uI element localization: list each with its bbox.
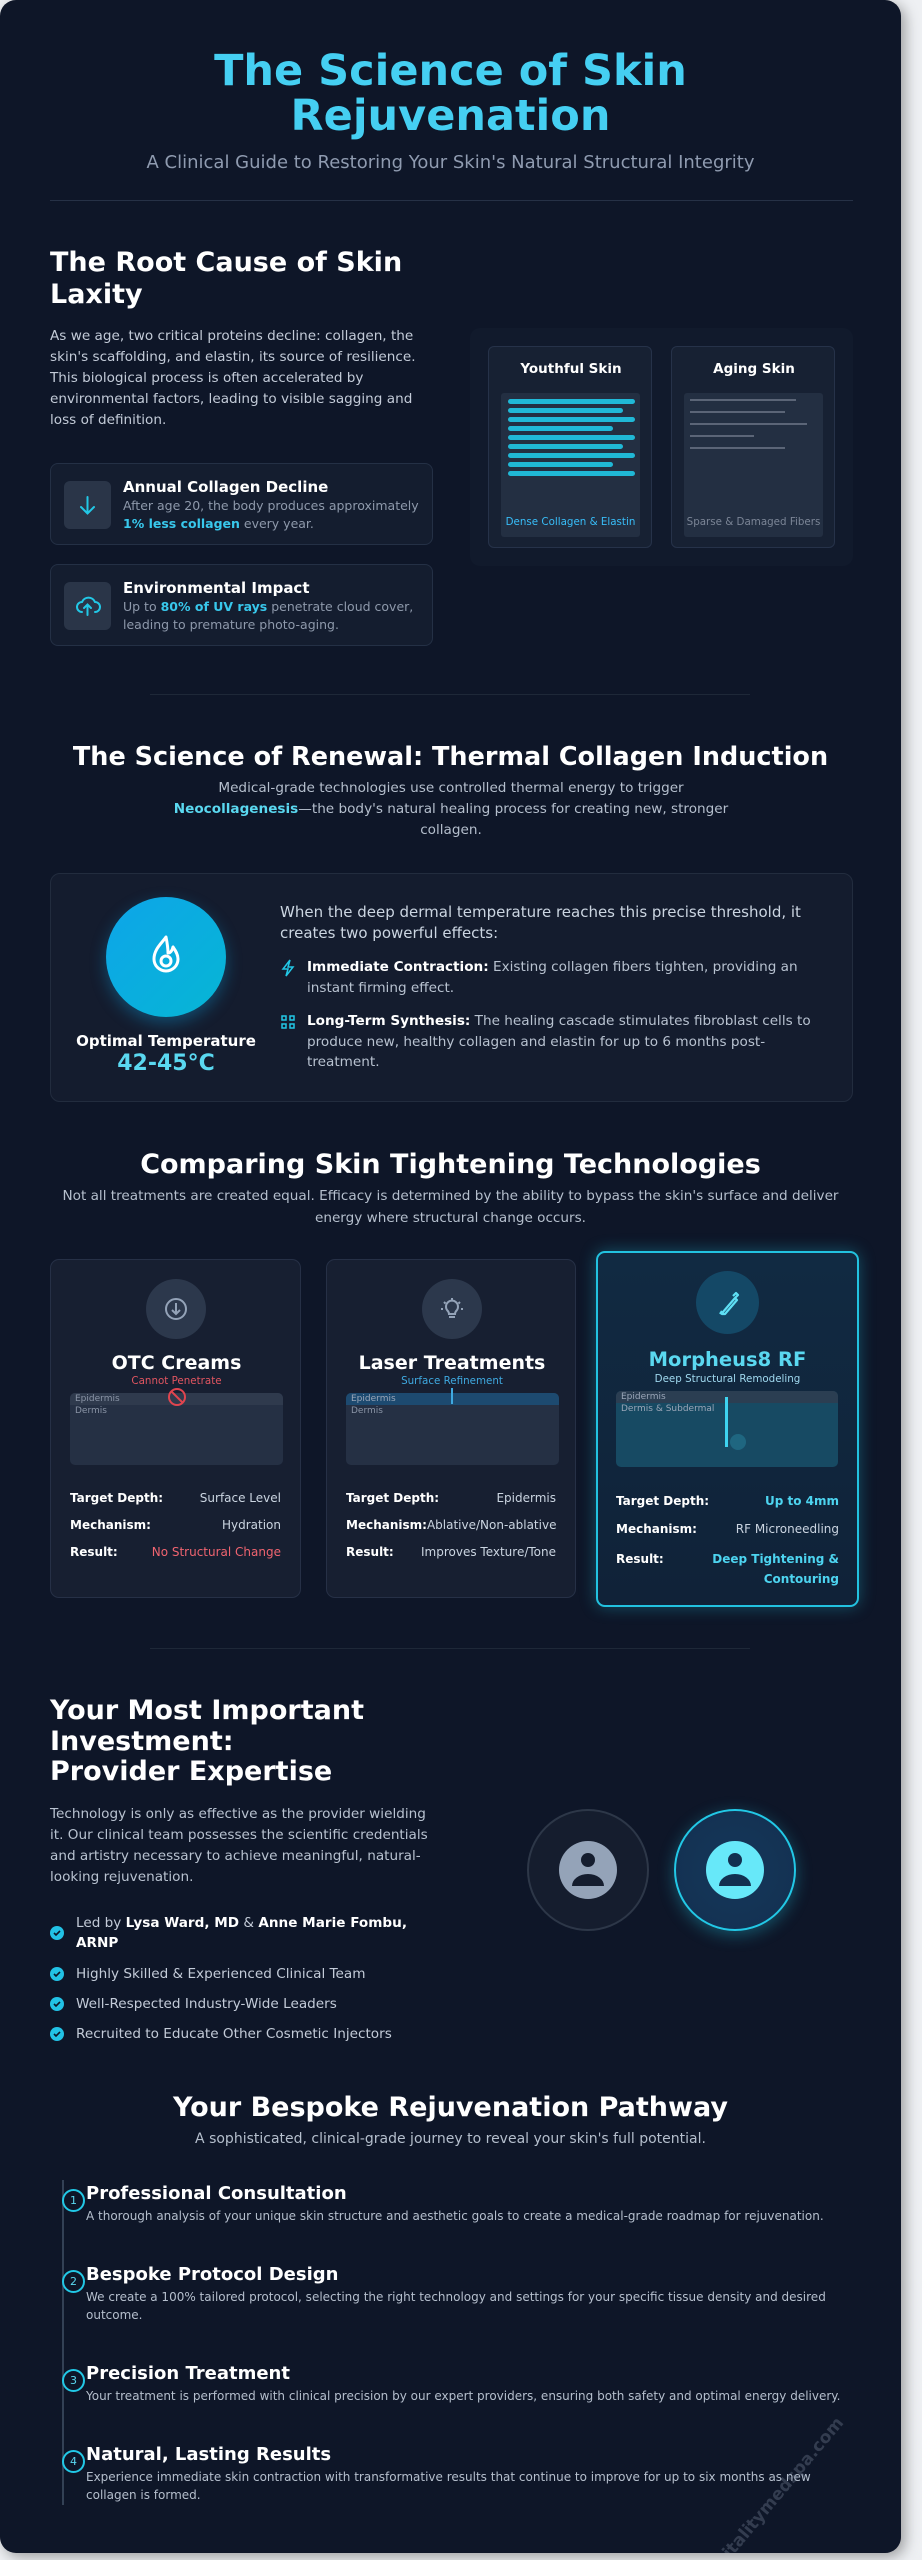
diagram: Dermis — [75, 1406, 107, 1416]
step 4: Experience immediate skin contraction with transformative results that continue to improve for up to six months as new collagen is formed. — [86, 2470, 811, 2502]
icon: provider avatars — [527, 1805, 804, 1943]
card: OTC creams: No Structural Change — [152, 1545, 281, 1559]
step 3: Precision Treatment — [86, 2363, 290, 2384]
card: OTC creams: Mechanism: — [70, 1518, 151, 1532]
heading: comparing technologies: Comparing Skin Tightening Technologies — [140, 1149, 761, 1180]
card: annual collagen decline: Annual Collagen Decline — [123, 478, 328, 496]
diagram — [346, 1393, 559, 1465]
card: environmental impact: Environmental Impact — [123, 579, 310, 597]
aging skin: Aging Skin — [713, 361, 795, 377]
panel: skin comparison — [470, 328, 853, 566]
label: optimal temperature: Optimal Temperature — [76, 1032, 256, 1050]
diagram: Dermis — [351, 1406, 383, 1416]
card: Morpheus8 RF: Mechanism: — [616, 1522, 697, 1536]
diagram: Epidermis — [351, 1394, 396, 1404]
card: laser treatments: Epidermis — [496, 1491, 556, 1505]
card: Morpheus8 RF: Contouring — [764, 1572, 839, 1586]
heading: root cause: The Root Cause of Skin Laxity — [50, 247, 402, 310]
step 4 — [62, 2444, 811, 2502]
youthful skin: Youthful Skin — [520, 361, 622, 377]
diagram: Epidermis — [75, 1394, 120, 1404]
card: Morpheus8 RF: Morpheus8 RF — [649, 1348, 806, 1371]
diagram — [616, 1391, 838, 1467]
card: Morpheus8 RF: Deep Structural Remodeling — [655, 1373, 800, 1385]
card: environmental impact: Up to 80% of UV rays penetrate cloud cover, leading to premature photo-aging. — [123, 599, 413, 632]
step 1: 1 — [70, 2194, 77, 2207]
text: pathway subtitle: A sophisticated, clinical-grade journey to reveal your skin's full potential. — [195, 2131, 706, 2147]
youthful skin — [488, 346, 652, 548]
title — [214, 46, 687, 141]
step 2: We create a 100% tailored protocol, selecting the right technology and settings for your specific tissue density and desired outcome. — [86, 2290, 826, 2322]
card: laser treatments: Target Depth: — [346, 1491, 439, 1505]
aging skin: Sparse & Damaged Fibers — [687, 516, 820, 528]
diagram: Epidermis — [621, 1392, 666, 1402]
card: laser treatments: Mechanism: — [346, 1518, 427, 1532]
card: laser treatments: Result: — [346, 1545, 394, 1559]
heading: provider expertise: Your Most Important Investment: — [50, 1695, 364, 1756]
icon — [696, 1271, 759, 1334]
subtitle: A Clinical Guide to Restoring Your Skin's Natural Structural Integrity — [146, 152, 754, 173]
card: Morpheus8 RF: Target Depth: — [616, 1494, 709, 1508]
step 4: Natural, Lasting Results — [86, 2444, 331, 2465]
text: comparing intro: Not all treatments are created equal. Efficacy is determined by the ability to bypass the skin's surface and deliver energy where structural change occurs. — [62, 1188, 839, 1226]
step 2: 2 — [70, 2275, 77, 2288]
heading: thermal collagen induction: The Science of Renewal: Thermal Collagen Induction — [73, 742, 828, 772]
label: optimal temperature — [76, 1032, 256, 1076]
card: OTC creams: Surface Level — [200, 1491, 281, 1505]
card: laser treatments: Surface Refinement — [401, 1375, 503, 1387]
bullet: immediate contraction: Immediate Contraction: Existing collagen fibers tighten, providing an instant firming effect. — [307, 959, 798, 996]
text: Highly Skilled & Experienced Clinical Team — [76, 1966, 365, 1982]
heading: provider expertise — [50, 1695, 364, 1787]
step 3 — [62, 2363, 840, 2403]
card: OTC creams: Hydration — [222, 1518, 281, 1532]
card: laser treatments: Laser Treatments — [359, 1352, 545, 1374]
step 1: A thorough analysis of your unique skin structure and aesthetic goals to create a medical-grade roadmap for rejuvenation. — [86, 2209, 824, 2223]
icon — [146, 1279, 206, 1339]
card: Morpheus8 RF: Deep Tightening & — [712, 1552, 839, 1566]
title: Rejuvenation — [291, 91, 610, 141]
card: Morpheus8 RF: Up to 4mm — [765, 1494, 839, 1508]
card: OTC creams: Cannot Penetrate — [131, 1375, 222, 1387]
card: Morpheus8 RF: RF Microneedling — [736, 1522, 839, 1536]
heading: provider expertise: Provider Expertise — [50, 1756, 332, 1787]
youthful skin: Dense Collagen & Elastin — [506, 516, 635, 528]
text: Recruited to Educate Other Cosmetic Injectors — [76, 2026, 392, 2042]
text: root cause paragraph: As we age, two critical proteins decline: collagen, the skin's scaffolding, and elastin, its source of resilience. This biological process is often accelerated by environmental factors, leading to visible sagging and loss of definition. — [50, 328, 416, 428]
step 3: 3 — [70, 2374, 77, 2387]
step 3: Your treatment is performed with clinical precision by our expert providers, ensuring both safety and optimal energy delivery. — [86, 2389, 840, 2403]
card: environmental impact — [50, 564, 433, 646]
text: provider paragraph: Technology is only as effective as the provider wielding it. Our clinical team possesses the scientific credentials and artistry necessary to achieve meaningful, natural-looking rejuvenation. — [50, 1806, 428, 1885]
checklist — [50, 1915, 407, 2042]
card: annual collagen decline — [50, 463, 433, 545]
card: OTC creams: OTC Creams — [112, 1352, 241, 1374]
bullet: long-term synthesis: Long-Term Synthesis: The healing cascade stimulates fibroblast cells to produce new, healthy collagen and elastin for up to 6 months post-treatment. — [307, 1013, 811, 1070]
aging skin — [671, 346, 835, 548]
timeline — [62, 2180, 840, 2505]
step 2 — [62, 2264, 826, 2322]
icon: down arrow — [64, 481, 111, 529]
card: Morpheus8 RF: Result: — [616, 1552, 664, 1566]
step 4: 4 — [70, 2455, 77, 2468]
card: laser treatments — [326, 1259, 576, 1598]
card: laser treatments: Ablative/Non-ablative — [427, 1518, 556, 1532]
text: renewal intro: Medical-grade technologies use controlled thermal energy to trigger Neocollagenesis—the body's natural healing process for creating new, stronger collagen. — [174, 780, 728, 838]
diagram: Dermis & Subdermal — [621, 1404, 714, 1414]
title: The Science of Skin — [214, 46, 687, 96]
heading: pathway: Your Bespoke Rejuvenation Pathway — [173, 2092, 728, 2123]
card: Morpheus8 RF — [596, 1251, 859, 1607]
icon: flame circle — [106, 897, 226, 1017]
step 1: Professional Consultation — [86, 2183, 347, 2204]
text: Led by Lysa Ward, MD & Anne Marie Fombu, ARNP — [76, 1915, 407, 1951]
panel: optimal temperature — [50, 873, 853, 1102]
icon — [422, 1279, 482, 1339]
step 2: Bespoke Protocol Design — [86, 2264, 338, 2285]
step 1 — [62, 2183, 824, 2223]
diagram — [70, 1393, 283, 1465]
card: OTC creams: Target Depth: — [70, 1491, 163, 1505]
icon: cloud upload — [64, 582, 111, 630]
card: OTC creams: Result: — [70, 1545, 118, 1559]
label: optimal temperature: 42-45°C — [117, 1051, 215, 1076]
card: laser treatments: Improves Texture/Tone — [421, 1545, 556, 1559]
card: OTC creams — [50, 1259, 301, 1598]
card: annual collagen decline: After age 20, the body produces approximately 1% less collagen every year. — [123, 498, 419, 531]
text: effects: When the deep dermal temperature reaches this precise threshold, it creates two powerful effects: — [280, 903, 801, 942]
text: Well-Respected Industry-Wide Leaders — [76, 1996, 337, 2012]
